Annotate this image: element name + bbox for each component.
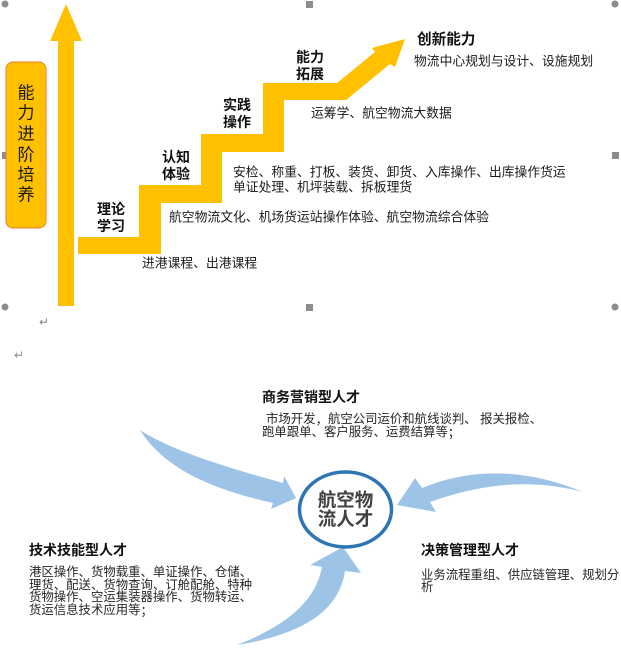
label box: 能力进阶培养: 培 — [18, 166, 34, 184]
step heading: 理论学习: 理论 — [97, 201, 125, 217]
text: cognition content: 航空物流文化、机场货运站操作体验、航空物流综合体验 — [169, 210, 489, 224]
block: 决策管理型人才: 决策管理型人才 — [421, 542, 519, 558]
selection handles — [2, 0, 619, 311]
block: 决策管理型人才: 业务流程重组、供应链管理、规划分 — [421, 567, 619, 582]
step heading: 认知体验 — [162, 149, 190, 182]
arrow: right curved — [397, 473, 583, 512]
block: 决策管理型人才 — [421, 542, 619, 594]
staircase arrow — [78, 39, 405, 254]
step heading: 实践操作: 实践 — [223, 97, 251, 113]
text: theory content: 进港课程、出港课程 — [142, 256, 257, 270]
step heading: 创新能力: 创新能力 — [417, 30, 475, 48]
step heading: 理论学习: 学习 — [97, 218, 125, 234]
vertical growth arrow — [50, 4, 82, 306]
label box: 能力进阶培养: 养 — [18, 186, 34, 204]
step heading: 认知体验: 体验 — [162, 166, 190, 182]
label box: 能力进阶培养: 能 — [18, 84, 34, 102]
step heading: 实践操作 — [223, 97, 251, 130]
block: 技术技能型人才 — [29, 542, 252, 619]
block: 决策管理型人才: 析 — [421, 580, 433, 594]
block: 商务营销型人才 — [262, 389, 542, 441]
center ellipse: 航空物流人才: 流人才 — [318, 508, 373, 530]
block: 商务营销型人才: 商务营销型人才 — [262, 389, 360, 405]
step heading: 能力拓展: 拓展 — [296, 66, 324, 82]
center ellipse: 航空物流人才 — [300, 472, 392, 547]
center ellipse: 航空物流人才: 航空物 — [318, 490, 373, 510]
paragraph marks: ↵ — [39, 315, 49, 329]
paragraph marks: ↵ — [14, 348, 24, 362]
block: 技术技能型人才: 港区操作、货物载重、单证操作、仓储、 — [29, 564, 252, 579]
paragraph marks — [14, 315, 49, 362]
text: practice content: 单证处理、机坪装载、拆板理货 — [233, 180, 412, 194]
step heading: 认知体验: 认知 — [162, 149, 190, 165]
step heading: 能力拓展 — [296, 49, 324, 82]
text: practice content — [233, 164, 566, 194]
text: practice content: 安检、称重、打板、装货、卸货、入库操作、出库操作货运 — [233, 164, 566, 180]
label box: 能力进阶培养: 进 — [18, 124, 34, 144]
block: 技术技能型人才: 理货、配送、货物查询、订舱配舱、特种 — [29, 577, 252, 592]
arrow: bottom curved — [237, 547, 361, 645]
block: 商务营销型人才: 跑单跟单、客户服务、运费结算等； — [262, 423, 460, 441]
label box: 能力进阶培养: 力 — [18, 104, 34, 122]
text: expansion content: 运筹学、航空物流大数据 — [311, 106, 452, 120]
step heading: 能力拓展: 能力 — [296, 49, 324, 65]
label box: 能力进阶培养 — [6, 62, 46, 228]
block: 技术技能型人才: 货运信息技术应用等； — [29, 601, 153, 619]
text: innovation content: 物流中心规划与设计、设施规划 — [414, 54, 593, 68]
block: 技术技能型人才: 技术技能型人才 — [29, 542, 127, 558]
arrow: top-left curved — [140, 430, 296, 509]
step heading: 理论学习 — [97, 201, 125, 234]
step heading: 实践操作: 操作 — [223, 114, 251, 130]
block: 商务营销型人才: 市场开发，航空公司运价和航线谈判、 报关报检、 — [266, 410, 542, 428]
label box: 能力进阶培养: 阶 — [18, 146, 34, 164]
block: 技术技能型人才: 货物操作、空运集装器操作、货物转运、 — [29, 589, 252, 604]
